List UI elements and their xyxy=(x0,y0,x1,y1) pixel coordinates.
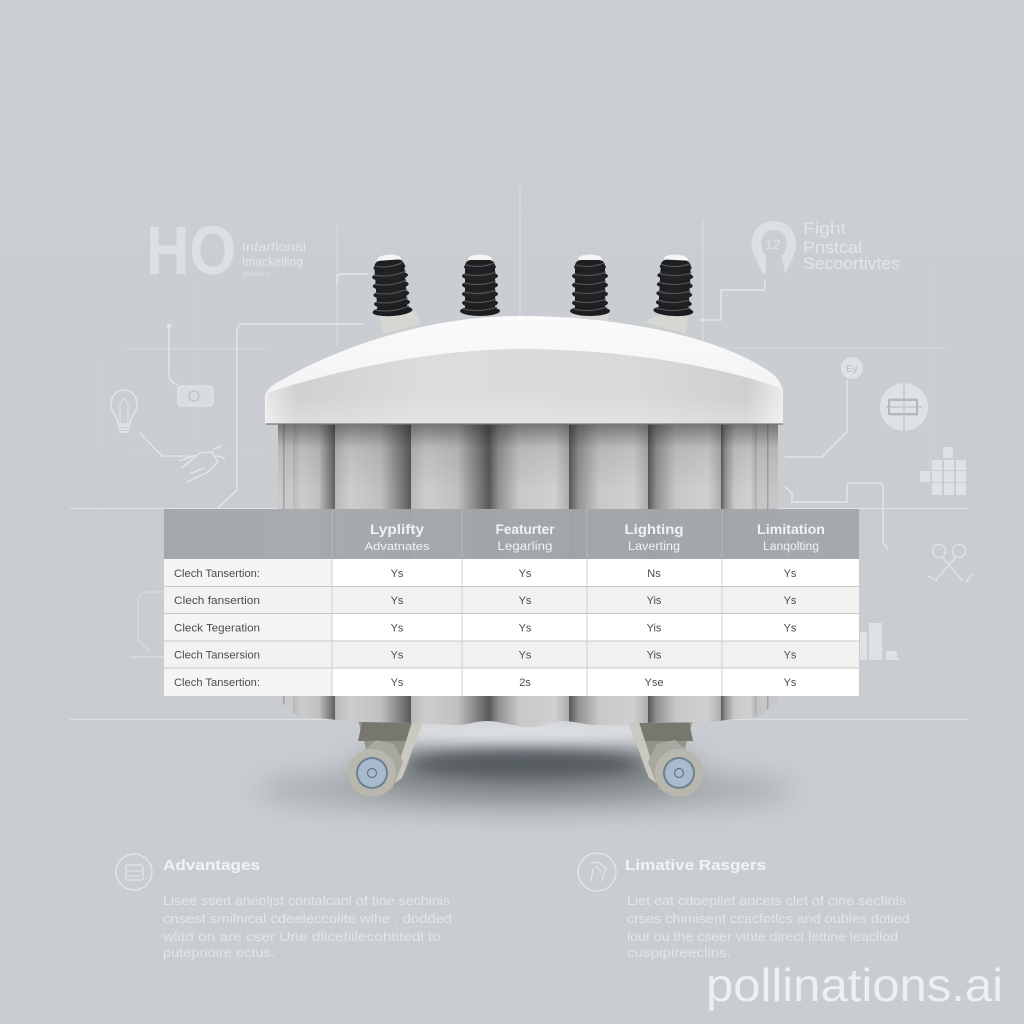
table values: Ns xyxy=(647,568,661,580)
watermark: pollinations.ai xyxy=(706,959,1003,1011)
icon: bar chart xyxy=(860,623,900,660)
floor shadow xyxy=(255,723,795,810)
limitations text: cuspipireeclins. xyxy=(627,945,731,960)
table row labels: Clech fansertion xyxy=(174,595,260,607)
HO caption: Infarfional xyxy=(242,240,306,254)
limitations text: Liet eat cdoepllet ancets clet of cine secfinls xyxy=(627,893,907,908)
table values: Yis xyxy=(647,650,662,662)
HO letters: HO xyxy=(146,212,236,289)
device: domed cap xyxy=(265,316,783,424)
axle xyxy=(358,740,403,796)
advantages text xyxy=(162,893,452,960)
comparison table xyxy=(164,509,859,696)
limitations text xyxy=(627,893,910,960)
table row labels xyxy=(174,568,260,689)
table header labels: Limitation xyxy=(757,521,825,537)
pin caption xyxy=(803,219,900,273)
table values: Ys xyxy=(784,622,797,634)
limitations text: lout ou the cseer vinte direct lettine leacllod xyxy=(627,929,898,944)
table values: Yis xyxy=(647,622,662,634)
limitations text: crses chimisent ccacfotlcs and oubles dotied xyxy=(627,911,910,926)
panel: advantages xyxy=(116,854,452,960)
table values: Ys xyxy=(391,677,404,689)
device: cylinder bank xyxy=(276,424,780,729)
left connector lines xyxy=(130,274,368,657)
table values: Ys xyxy=(519,568,532,580)
table values: Yis xyxy=(647,595,662,607)
right connector lines xyxy=(700,280,888,549)
table values xyxy=(391,568,797,689)
table values: Ys xyxy=(784,650,797,662)
icon: advantages badge xyxy=(116,854,152,890)
device: terminal bolts xyxy=(369,253,696,334)
table header labels: Advatnates xyxy=(364,541,430,553)
pin caption: Fight xyxy=(803,219,846,238)
advantages heading: Advantages xyxy=(163,857,260,874)
table row labels: Clech Tansersion xyxy=(174,650,260,662)
pin caption: Secoortivtes xyxy=(803,254,900,273)
table values: Ys xyxy=(391,650,404,662)
table values: Ys xyxy=(784,595,797,607)
table row labels: Clech Tansertion: xyxy=(174,677,260,689)
table values: 2s xyxy=(519,677,531,689)
heading: pin with text xyxy=(752,219,900,274)
table values: Ys xyxy=(519,622,532,634)
icon: node dot xyxy=(166,324,172,328)
bolt 4 xyxy=(644,254,696,334)
icon: light bulb xyxy=(111,390,137,432)
icon: pixel grid xyxy=(920,447,966,495)
advantages text: puteprioire ectus. xyxy=(163,945,275,960)
heading: HO block xyxy=(146,212,306,289)
advantages text: Lisee ssed aneoljst contalcanl of tine sechinis xyxy=(163,893,451,908)
table rows xyxy=(164,559,859,696)
table header labels: Laverting xyxy=(628,541,680,553)
table values: Ys xyxy=(784,677,797,689)
faint circuit lines xyxy=(70,185,968,720)
wheel face xyxy=(348,749,396,797)
table header xyxy=(164,509,859,559)
table values: Ys xyxy=(519,595,532,607)
HO caption: dosian xyxy=(242,271,271,278)
table header labels: Featurter xyxy=(496,521,555,537)
table row labels: Clech Tansertion: xyxy=(174,568,260,580)
icon: flower badge xyxy=(841,357,863,379)
bolt 2 xyxy=(460,254,500,316)
table header labels xyxy=(364,521,825,553)
panel: limitations xyxy=(578,853,910,960)
table values: Ys xyxy=(391,622,404,634)
wheel assembly right xyxy=(628,720,703,797)
limitations heading: Limative Rasgers xyxy=(625,857,766,874)
table header labels: Lanqolting xyxy=(763,541,819,553)
wheel assembly left xyxy=(348,720,423,797)
icon: hand xyxy=(179,446,225,482)
icon: limitations badge xyxy=(578,853,616,891)
table values: Ys xyxy=(391,568,404,580)
icon: pin 12 xyxy=(752,221,796,274)
table header labels: Legarling xyxy=(498,541,552,553)
table values: Ys xyxy=(784,568,797,580)
icon: pin 12: 12 xyxy=(765,236,781,252)
table header labels: Lighting xyxy=(624,521,684,537)
HO caption xyxy=(242,240,306,278)
icon: globe xyxy=(880,383,928,431)
icon: keys xyxy=(928,544,972,582)
advantages text: wlitd on are cser Une dlicefiilecohtitedl to xyxy=(162,929,441,944)
table values: Yse xyxy=(645,677,663,689)
icon: switch box xyxy=(178,386,213,406)
table row labels: Cleck Tegeration xyxy=(174,622,260,634)
HO caption: Imacketling xyxy=(242,254,303,269)
bolt 1 xyxy=(369,253,421,334)
icon: flower badge: Ey xyxy=(846,364,858,375)
pin caption: Pnstcal xyxy=(803,238,862,257)
bolt 3 xyxy=(570,254,610,321)
table values: Ys xyxy=(391,595,404,607)
infographic canvas xyxy=(70,185,1000,1010)
bracket xyxy=(358,720,422,792)
table values: Ys xyxy=(519,650,532,662)
table header labels: Lyplifty xyxy=(370,521,424,537)
advantages text: cnsest smilnical cdeeleccolite wlhe . dodded xyxy=(163,911,452,926)
table grid xyxy=(164,509,859,696)
